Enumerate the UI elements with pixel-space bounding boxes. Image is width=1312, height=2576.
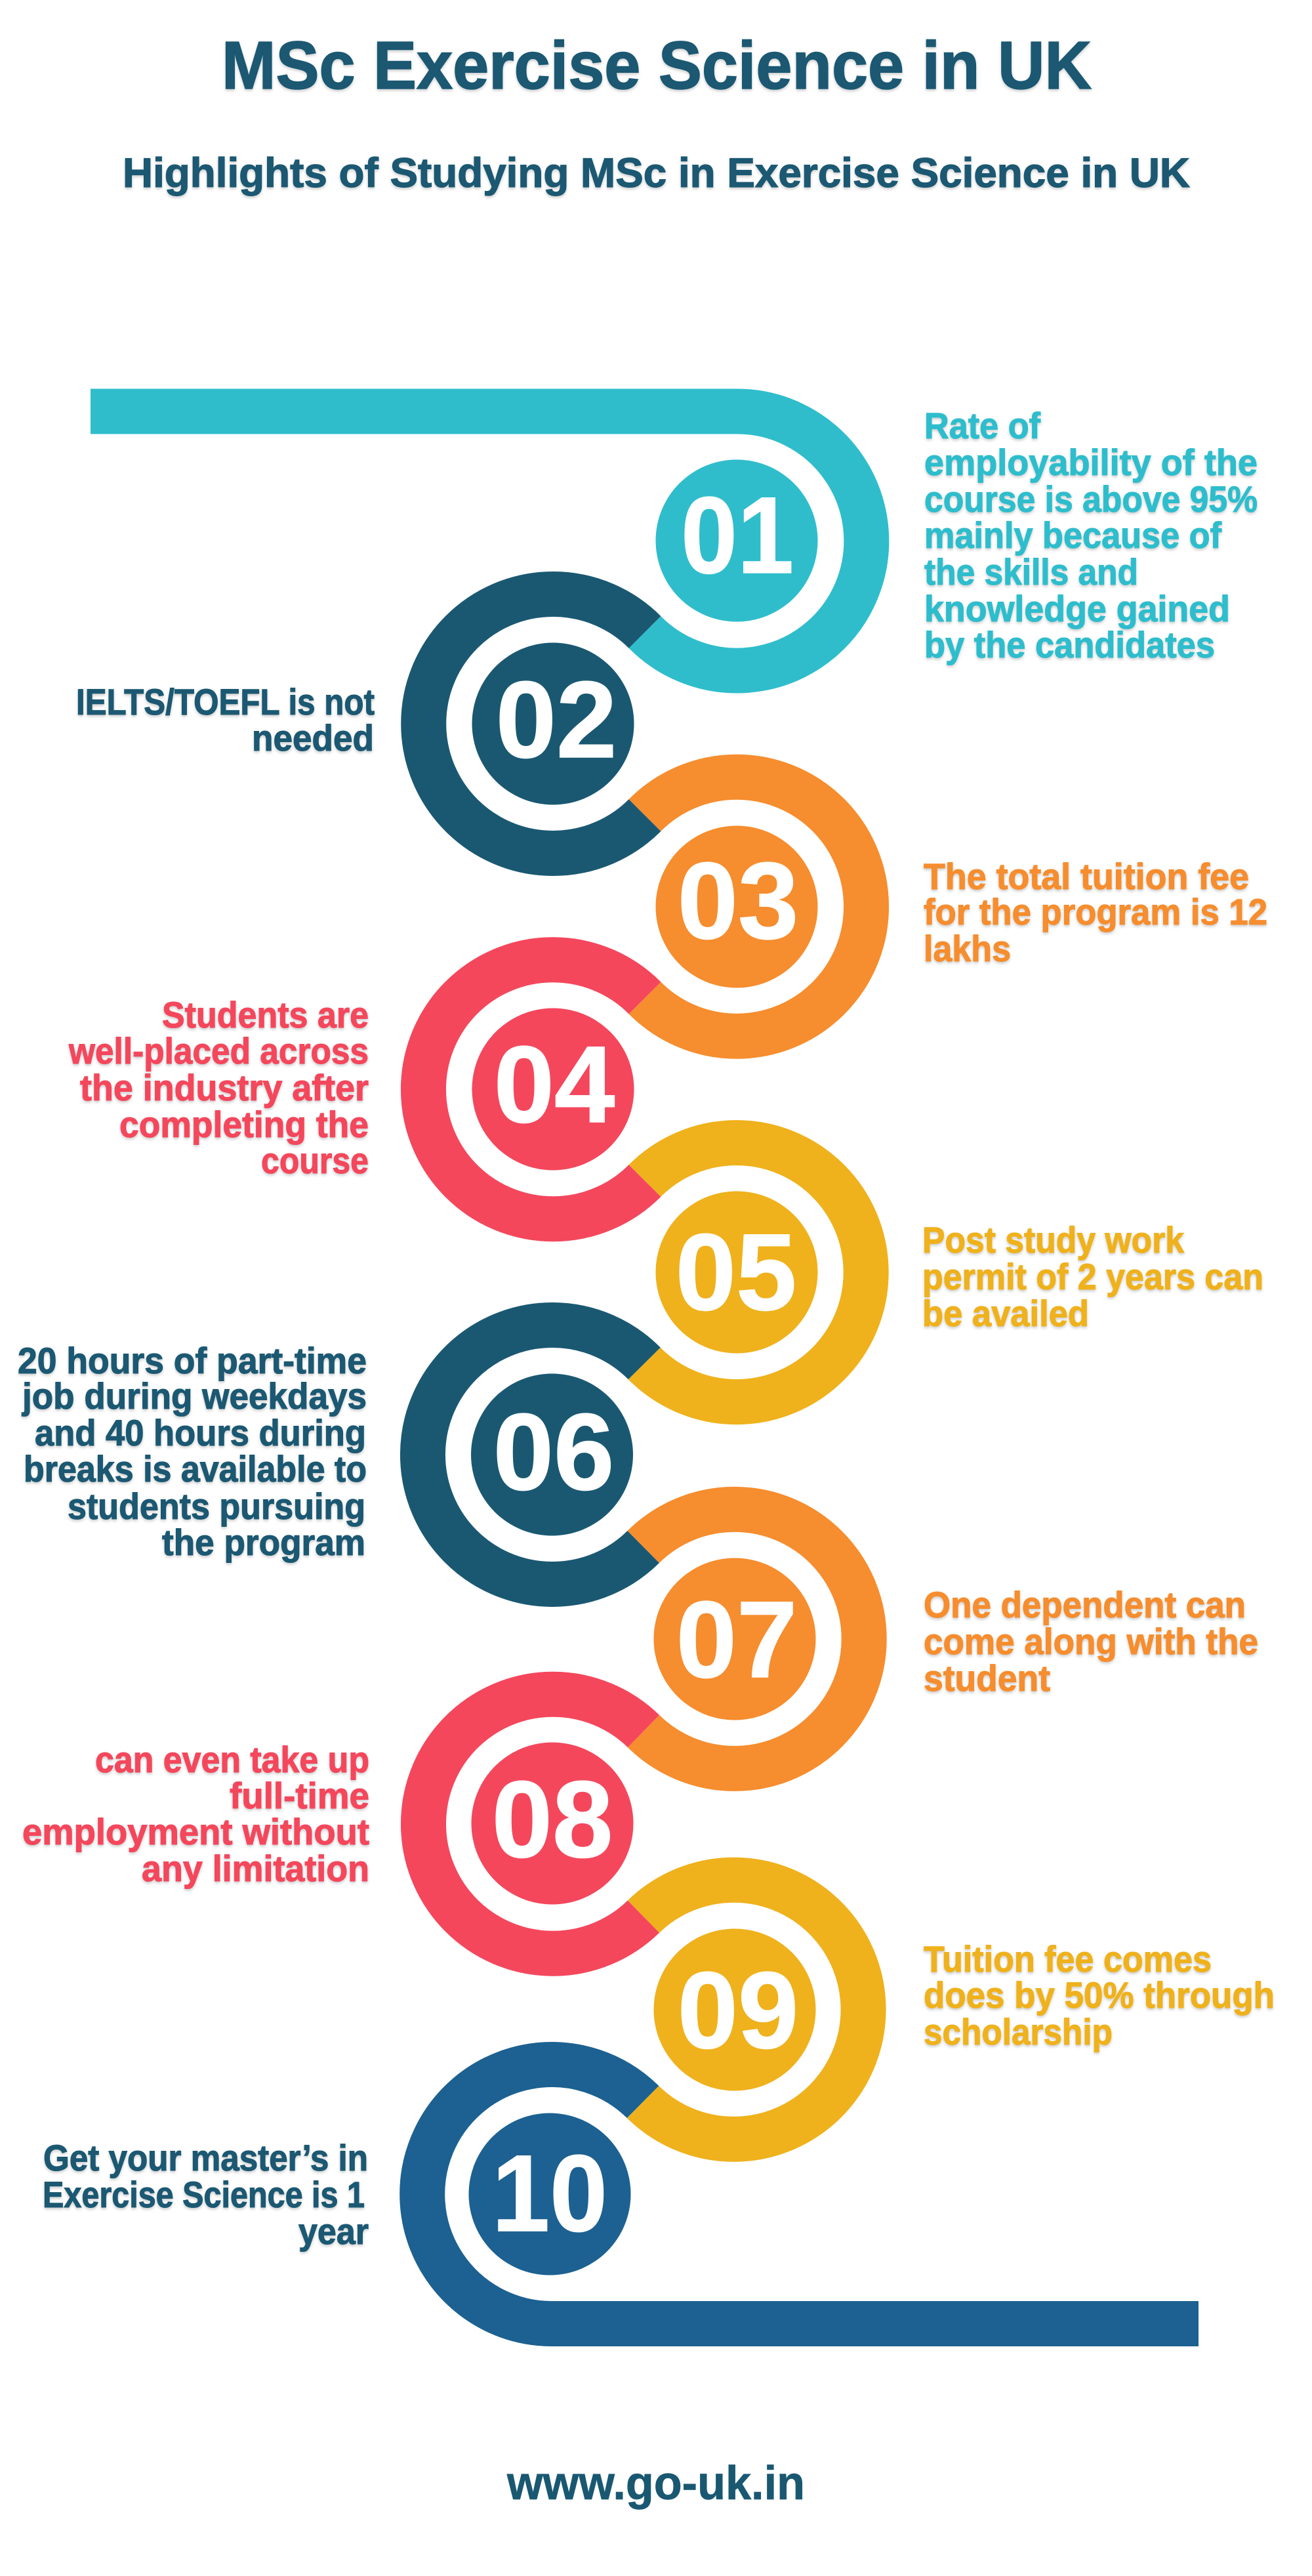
badge 01 — [656, 459, 817, 622]
text 02: IELTS/TOEFL is not — [76, 681, 375, 722]
text 07: One dependent can — [924, 1584, 1246, 1625]
badge 03: 03 — [678, 841, 798, 962]
badge 06 — [471, 1374, 633, 1535]
text 04: well-placed across — [68, 1030, 369, 1071]
badge 04: 04 — [494, 1024, 615, 1146]
text 05: permit of 2 years can — [922, 1256, 1263, 1297]
text 04 — [68, 994, 369, 1181]
text 08: can even take up — [95, 1739, 369, 1780]
badge 09: 09 — [678, 1950, 798, 2071]
text 05: be availed — [922, 1293, 1089, 1334]
ring 09 — [643, 1880, 863, 2139]
badge 04 — [472, 1008, 634, 1171]
badge 07: 07 — [676, 1579, 797, 1701]
text 08: any limitation — [142, 1848, 369, 1889]
text 10: Exercise Science is 1 — [43, 2174, 365, 2215]
badge 02: 02 — [496, 659, 617, 781]
text 07: come along with the — [924, 1621, 1258, 1662]
ring 01 with top bar — [91, 411, 867, 671]
text 03 — [924, 856, 1267, 969]
text 04: course — [261, 1140, 369, 1181]
badge 05 — [656, 1192, 817, 1353]
text 10 — [43, 2137, 369, 2252]
badge 08 — [471, 1743, 634, 1904]
text 01: knowledge gained — [924, 588, 1230, 629]
ring 03 — [645, 777, 867, 1036]
text 04: Students are — [162, 994, 369, 1035]
ring 05 — [644, 1143, 866, 1402]
ring 04 — [423, 960, 645, 1219]
text 01: mainly because of — [924, 514, 1221, 556]
text 09: Tuition fee comes — [924, 1938, 1212, 1980]
step 01 — [91, 405, 1258, 671]
text 06: job during weekdays — [22, 1375, 367, 1417]
badge 10: 10 — [492, 2133, 607, 2254]
text 01: Rate of — [924, 405, 1040, 446]
text 04: completing the — [119, 1104, 369, 1145]
step 09 — [643, 1880, 1275, 2139]
badge 03 — [656, 825, 817, 988]
badge 09 — [653, 1929, 816, 2090]
step 08 — [22, 1694, 644, 1953]
text 10: Get your master’s in — [43, 2137, 368, 2178]
text 04: the industry after — [80, 1067, 369, 1108]
text 03: for the program is 12 — [924, 891, 1267, 932]
text 10: year — [298, 2211, 369, 2252]
text 06: breaks is available to — [24, 1448, 367, 1489]
ring 08 — [423, 1694, 644, 1953]
text 08: employment without — [22, 1811, 369, 1852]
text 09: does by 50% through — [924, 1974, 1275, 2016]
badge 10 — [468, 2113, 631, 2275]
ring 07 — [644, 1509, 864, 1768]
badge 06: 06 — [493, 1392, 614, 1513]
text 08 — [22, 1739, 369, 1889]
badge 07 — [653, 1558, 816, 1720]
text 06: and 40 hours during — [35, 1412, 366, 1453]
text 09: scholarship — [924, 2011, 1113, 2052]
text 08: full-time — [230, 1775, 369, 1816]
step 07 — [644, 1509, 1258, 1768]
step 03 — [645, 777, 1267, 1036]
text 06: 20 hours of part-time — [18, 1340, 367, 1381]
text 03: lakhs — [924, 928, 1011, 969]
text 02: needed — [252, 717, 374, 758]
website url: www.go-uk.in — [506, 2457, 805, 2510]
text 07: student — [924, 1657, 1050, 1699]
text 06 — [18, 1340, 367, 1563]
text 06: the program — [162, 1522, 365, 1563]
text 03: The total tuition fee — [924, 856, 1249, 897]
text 01: employability of the — [924, 442, 1258, 483]
badge 05: 05 — [676, 1212, 796, 1333]
badge 02 — [472, 643, 634, 804]
text 01 — [924, 405, 1258, 665]
title: MSc Exercise Science in UK — [222, 28, 1092, 103]
badge 01: 01 — [681, 475, 794, 596]
text 01: by the candidates — [924, 624, 1215, 665]
text 07 — [924, 1584, 1258, 1699]
step 10 — [43, 2065, 1199, 2324]
ring 10 with bottom bar — [422, 2065, 1199, 2324]
text 01: course is above 95% — [924, 478, 1258, 520]
step 05 — [644, 1143, 1263, 1402]
text 06: students pursuing — [68, 1485, 365, 1527]
text 05: Post study work — [922, 1219, 1185, 1260]
text 05 — [922, 1219, 1263, 1334]
badge 08: 08 — [492, 1759, 613, 1880]
subtitle: Highlights of Studying MSc in Exercise Science in UK — [123, 150, 1190, 196]
ring 06 — [422, 1325, 644, 1585]
text 01: the skills and — [924, 551, 1138, 592]
ring 02 — [424, 594, 645, 854]
step 06 — [18, 1325, 644, 1585]
step 04 — [68, 960, 645, 1219]
text 02 — [76, 681, 375, 758]
step 02 — [76, 594, 645, 854]
text 09 — [924, 1938, 1275, 2052]
